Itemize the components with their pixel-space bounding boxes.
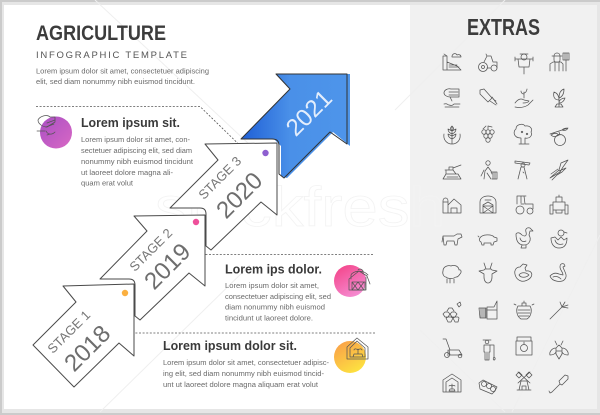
icon grid bbox=[442, 53, 569, 394]
arrow: stage 2 bbox=[100, 215, 205, 320]
icon: seeder bbox=[444, 89, 460, 107]
intro text: Lorem ipsum dolor sit amet, consectetuer adipiscing bbox=[36, 66, 209, 76]
heading: extras: EXTRAS bbox=[467, 14, 540, 40]
icon: rooster bbox=[516, 228, 533, 248]
icon: pitchfork bbox=[550, 302, 568, 319]
text block: stage 2: tincidunt ut laoreet dolore. bbox=[225, 314, 313, 322]
icon: apple branch bbox=[550, 128, 568, 146]
icon: milk can bbox=[479, 301, 497, 319]
subtitle: INFOGRAPHIC TEMPLATE bbox=[36, 50, 187, 61]
icon: goat bbox=[479, 263, 497, 283]
text block: stage 3: quam erat volut bbox=[81, 178, 134, 188]
dashed connector: stage 3 bbox=[36, 106, 264, 162]
dot: stage 3 bbox=[262, 150, 269, 156]
icon: scarecrow bbox=[515, 54, 533, 74]
arrow: stage 1: STAGE 1 bbox=[44, 307, 93, 356]
panel: infographic bbox=[4, 5, 410, 409]
icon: combine bbox=[550, 195, 568, 214]
panel: extras bbox=[410, 5, 597, 409]
intro text: elit, sed diam nonummy nibh euismod tincidunt. bbox=[36, 77, 195, 86]
text block: stage 3 bbox=[81, 116, 194, 188]
text block: stage 2 bbox=[225, 262, 331, 322]
circle: yellow bbox=[334, 341, 366, 373]
icon: beehive bbox=[514, 301, 534, 319]
intro text bbox=[36, 66, 209, 86]
icon: watering bbox=[480, 89, 497, 105]
icon: turkey bbox=[515, 264, 532, 281]
text block: stage 2: Lorem ipsum dolor sit amet, bbox=[225, 281, 319, 290]
text block: stage 3: Lorem ipsum sit. bbox=[81, 116, 180, 130]
icon: fruit tree bbox=[514, 124, 532, 144]
arrow: stage 2: 2019 bbox=[139, 238, 196, 295]
dot: stage 2 bbox=[193, 219, 199, 225]
icon: windmill bbox=[516, 372, 532, 390]
text block: stage 3: ut laoreet dolore magna ali- bbox=[81, 168, 173, 177]
icon: lawn mower bbox=[443, 339, 462, 358]
icon: honeycomb bbox=[443, 302, 461, 322]
text block: stage 3: sectetuer adipiscing elit, sed diam bbox=[81, 146, 192, 155]
dashed connector: stage 1 bbox=[110, 294, 375, 333]
icon: goose bbox=[550, 264, 566, 281]
text block: stage 1: unt ut laoreet dolore magna aliquam erat volut bbox=[163, 380, 319, 389]
icon: farm buildings bbox=[443, 198, 461, 213]
watermark: stockfresh bbox=[155, 175, 445, 238]
text block: stage 1: Lorem ipsum dolor sit. bbox=[163, 339, 297, 353]
icon: tractor bbox=[516, 196, 533, 214]
icon: wheat bbox=[444, 126, 460, 144]
icon: grapes bbox=[482, 126, 494, 142]
icon: farmer with tool bbox=[515, 161, 530, 179]
arrow: stage 1: 2018 bbox=[59, 320, 116, 377]
icon: harvester bbox=[443, 165, 461, 179]
dashed connector: stage 2 bbox=[185, 223, 373, 254]
icon: pig bbox=[478, 235, 497, 245]
arrow: stage 3: 2020 bbox=[211, 167, 268, 224]
icon: seeding hand bbox=[37, 116, 55, 135]
icon: bee bbox=[550, 341, 568, 359]
circle: purple bbox=[40, 116, 72, 148]
text block: stage 1 bbox=[163, 339, 329, 389]
arrow: stage 3: STAGE 3 bbox=[195, 153, 244, 202]
arrow: stage 2: STAGE 2 bbox=[126, 225, 175, 274]
icon: hand sprout bbox=[515, 89, 533, 107]
title: AGRICULTURE bbox=[36, 22, 166, 45]
text block: stage 3: Lorem ipsum dolor sit amet, con- bbox=[81, 135, 190, 144]
arrow: 2021 bbox=[241, 74, 350, 178]
icon: farm field bbox=[443, 54, 461, 70]
dot: stage 1 bbox=[122, 290, 128, 296]
text block: stage 1: ing elit, sed diam nonummy nibh euismod tincid- bbox=[163, 369, 324, 378]
icon: greenhouse line bbox=[443, 374, 461, 392]
icon: eggs tray bbox=[479, 380, 497, 394]
icon: barn bbox=[349, 269, 370, 290]
icon: tractor small bbox=[478, 54, 497, 72]
icon: farmer bbox=[550, 53, 569, 71]
icon: gardener bbox=[483, 340, 495, 360]
arrow: stage 1 bbox=[33, 284, 134, 387]
icon: apple jar bbox=[516, 337, 532, 355]
arrow: 2021: 2021 bbox=[281, 85, 338, 142]
icon: shovel bbox=[549, 375, 568, 393]
icon: seedling bbox=[554, 89, 565, 107]
arrow: stage 3 bbox=[170, 143, 277, 250]
text block: stage 2: consectetuer adipiscing elit, sed bbox=[225, 292, 331, 301]
circle: pink bbox=[334, 265, 366, 297]
text block: stage 1: Lorem ipsum dolor sit amet, consectetuer adipisc- bbox=[163, 358, 329, 367]
icon: chick in egg bbox=[551, 230, 567, 248]
icon: worker bbox=[481, 161, 497, 179]
text block: stage 2: Lorem ips dolor. bbox=[225, 262, 322, 276]
icon: pruning shears bbox=[550, 160, 568, 180]
icon: cow bbox=[442, 234, 462, 245]
text block: stage 2: diam nonummy nibh euismod bbox=[225, 302, 325, 312]
text block: stage 3: nonummy nibh euismod tincidunt bbox=[81, 157, 194, 166]
icon: sheep bbox=[443, 265, 461, 283]
icon: greenhouse bbox=[347, 338, 368, 359]
icon: barn front bbox=[480, 196, 496, 213]
